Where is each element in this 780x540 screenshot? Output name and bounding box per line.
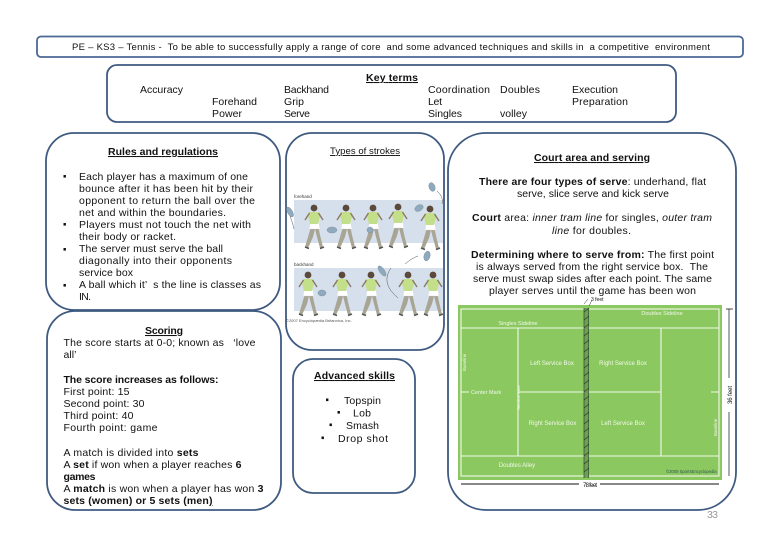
title bar — [37, 36, 743, 57]
dimension: 78 feet: 78 feet — [583, 483, 597, 489]
skills list: Drop shot — [338, 433, 388, 445]
court labels: Left Service Box — [530, 361, 574, 367]
rules list: bounce after it has been hit by their — [79, 183, 254, 195]
court labels: Center Mark — [471, 390, 502, 396]
serving text: serve must swap sides after each point. The same — [473, 273, 712, 285]
scoring text: games — [64, 471, 96, 483]
dimension: 36 feet — [726, 309, 734, 476]
scoring text: A match is won when a player has won 3 — [64, 483, 264, 495]
court labels: Singles Sideline — [498, 321, 538, 327]
key terms list: Serve — [284, 108, 310, 120]
court labels: Right Service Box — [599, 361, 647, 367]
scoring text — [64, 337, 264, 507]
scoring text: all’ — [64, 349, 76, 361]
serving text — [471, 176, 714, 297]
serving text: Determining where to serve from: The first point — [471, 249, 714, 261]
rules list: The server must serve the ball — [79, 243, 223, 255]
panel: scoring — [47, 311, 281, 510]
rules list: Each player has a maximum of one — [79, 171, 248, 183]
panel: advanced skills — [293, 359, 415, 493]
scoring text: The score increases as follows: — [64, 374, 218, 386]
rules list: their body or racket. — [79, 231, 176, 243]
serving text: Court area: inner tram line for singles, outer tram — [472, 212, 712, 224]
scoring text: Fourth point: game — [64, 422, 158, 434]
rules list: opponent to return the ball over the — [79, 195, 255, 207]
rules list: service box — [79, 267, 134, 279]
panel: key terms — [107, 65, 676, 122]
key terms list: volley — [500, 108, 528, 120]
dimension: 3 feet: 3 feet — [591, 297, 604, 303]
key terms list: Preparation — [572, 96, 628, 108]
heading: rules and regulations: Rules and regulations — [108, 146, 218, 158]
heading: court area and serving: Court area and serving — [534, 152, 650, 164]
key terms list: Coordination — [428, 84, 490, 96]
scoring text: sets (women) or 5 sets (men) — [64, 495, 212, 507]
heading: types of strokes: Types of strokes — [330, 146, 400, 157]
scoring text: A set if won when a player reaches 6 — [64, 459, 242, 471]
serving text: There are four types of serve: underhand, flat — [479, 176, 706, 188]
serving text: player serves until the game has been won — [489, 285, 696, 297]
dimension: 36 feet: 36 feet — [728, 386, 734, 404]
illustration: forehand and backhand sequences: forehand — [294, 194, 312, 199]
scoring text: Third point: 40 — [64, 410, 134, 422]
key terms list: Accuracy — [140, 84, 184, 96]
skills list: Topspin — [344, 395, 381, 407]
court labels: ©2009 SportsEncyclopedia — [666, 469, 717, 474]
serving text: is always served from the right service box. The — [476, 261, 708, 273]
scoring text: Second point: 30 — [64, 398, 145, 410]
net — [584, 308, 589, 478]
title bar: PE – KS3 – Tennis - To be able to successfully apply a range of core and some advanced techniques and skills in a competitive environment — [72, 42, 710, 53]
court labels: Service Line — [516, 385, 521, 410]
panel: rules and regulations — [46, 133, 280, 310]
court labels: Baseline — [462, 353, 467, 371]
court labels: Right Service Box — [529, 421, 576, 427]
panel: court area and serving — [448, 133, 736, 510]
key terms list: Doubles — [500, 84, 540, 96]
rules list: net and within the boundaries. — [79, 207, 226, 219]
court labels: Doubles Alley — [499, 463, 535, 469]
dimension: 3 feet — [584, 297, 604, 306]
court labels: Left Service Box — [601, 421, 645, 427]
illustration: forehand and backhand sequences: backhand — [294, 262, 314, 267]
rules list — [64, 171, 261, 303]
illustration: forehand and backhand sequences — [285, 182, 443, 323]
rules list: Players must not touch the net with — [79, 219, 251, 231]
court labels: Baseline — [713, 418, 718, 436]
panel: types of strokes — [285, 133, 444, 350]
heading: scoring: Scoring — [145, 325, 183, 337]
skills list — [322, 395, 388, 445]
heading: advanced skills: Advanced skills — [314, 370, 395, 382]
skills list: Lob — [353, 408, 371, 420]
key terms list — [140, 84, 628, 120]
rules list: IN. — [79, 291, 91, 303]
key terms list: Forehand — [212, 96, 257, 108]
page number: 3 3 — [707, 509, 718, 521]
key terms list: Let — [428, 96, 442, 108]
key terms list: Grip — [284, 96, 304, 108]
scoring text: The score starts at 0-0; known as ‘love — [64, 337, 256, 349]
serving text: serve, slice serve and kick serve — [517, 188, 669, 200]
key terms list: Execution — [572, 84, 618, 96]
scoring text: First point: 15 — [64, 386, 130, 398]
key terms list: Power — [212, 108, 242, 120]
illustration: forehand and backhand sequences: ©2007 Encyclopædia Britannica, Inc. — [286, 318, 352, 323]
diagram: tennis court — [458, 297, 734, 489]
key terms list: Backhand — [284, 84, 329, 96]
rules list: A ball which it’ s the line is classes as — [79, 279, 261, 291]
heading: key terms: Key terms — [366, 72, 418, 84]
skills list: Smash — [346, 420, 379, 432]
court labels: Doubles Sideline — [641, 311, 683, 317]
rules list: diagonally into their opponents — [79, 255, 232, 267]
court labels — [462, 311, 718, 474]
serving text: line for doubles. — [552, 225, 631, 237]
key terms list: Singles — [428, 108, 462, 120]
scoring text: A match is divided into sets — [64, 447, 199, 459]
